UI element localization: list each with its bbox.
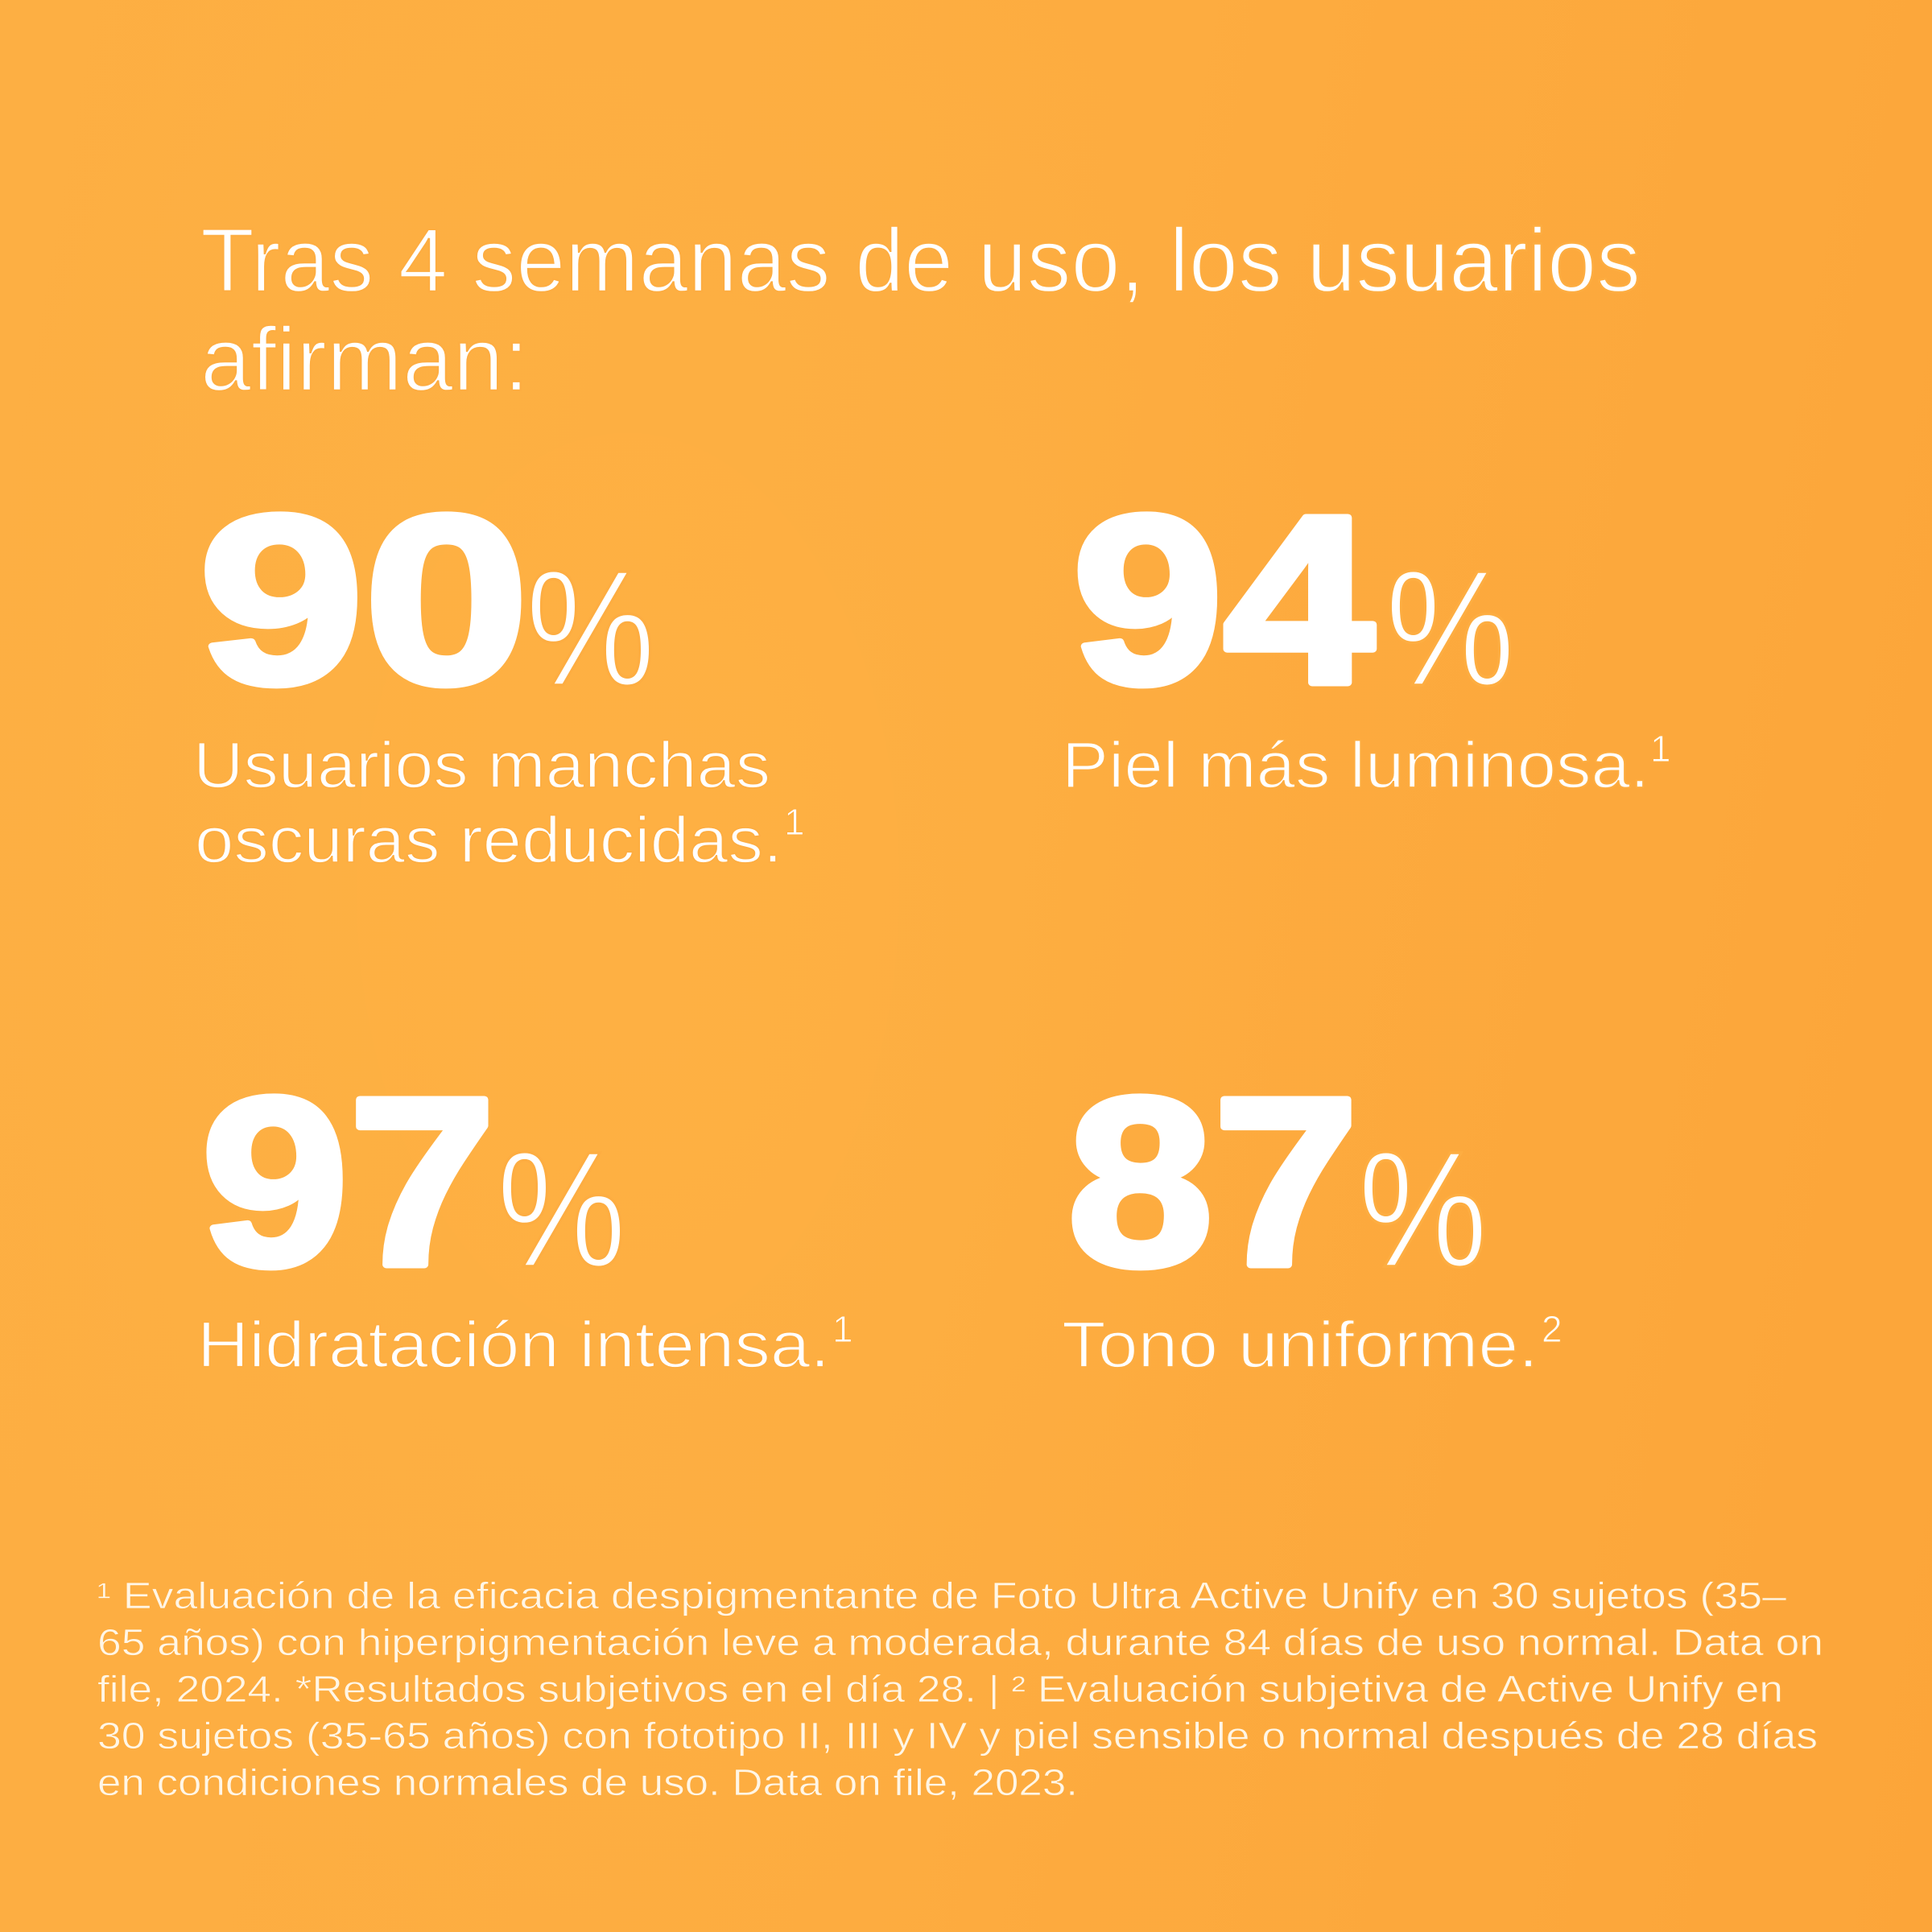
title: Tras 4 semanas de uso, los usuarios xyxy=(200,210,1641,311)
caption: dark spots: Usuarios manchas xyxy=(193,729,770,802)
number: 97% xyxy=(201,1048,626,1316)
title: afirman: xyxy=(200,309,529,410)
number: 87%: 87 xyxy=(1067,1048,1359,1316)
number: 97%: % xyxy=(497,1117,626,1302)
number: 94%: % xyxy=(1385,536,1515,720)
caption: brighter skin: Piel más luminosa. xyxy=(1062,729,1649,802)
footnotes: file, 2024. *Resultados subjetivos en el día 28. | ² Evaluación subjetiva de Active Unify en xyxy=(97,1668,1783,1710)
footnotes: ¹ Evaluación de la eficacia despigmentante de Foto Ultra Active Unify en 30 sujetos (35– xyxy=(97,1575,1786,1616)
panel: stat 87% xyxy=(1062,1048,1563,1381)
panel: stat 90% xyxy=(193,466,805,877)
caption: hydration: 1 xyxy=(832,1308,853,1350)
number: 97%: 97 xyxy=(201,1048,496,1316)
panel: stat 97% xyxy=(197,1048,853,1381)
number: 90% xyxy=(199,466,655,734)
footnotes: 30 sujetos (35-65 años) con fototipo II, III y IV y piel sensible o normal después de 28 días xyxy=(97,1715,1818,1757)
caption: hydration: Hidratación intensa. xyxy=(197,1309,830,1381)
panel: stat 94% xyxy=(1062,466,1671,802)
caption: dark spots: 1 xyxy=(784,801,805,843)
number: 94% xyxy=(1072,466,1515,734)
caption: even tone: Tono uniforme. xyxy=(1062,1309,1538,1381)
number: 90%: % xyxy=(526,536,655,720)
caption: dark spots xyxy=(193,729,805,877)
caption: even tone: 2 xyxy=(1542,1308,1563,1350)
number: 87% xyxy=(1067,1048,1488,1316)
footnotes: en condiciones normales de uso. Data on file, 2023. xyxy=(97,1761,1078,1803)
number: 90%: 90 xyxy=(199,466,529,734)
footnotes xyxy=(97,1575,1823,1803)
caption: dark spots: oscuras reducidas. xyxy=(195,804,782,877)
number: 94%: 94 xyxy=(1072,466,1376,734)
number: 87%: % xyxy=(1358,1117,1488,1302)
title xyxy=(200,210,1641,410)
caption: brighter skin: 1 xyxy=(1650,728,1671,770)
footnotes: 65 años) con hiperpigmentación leve a moderada, durante 84 días de uso normal. Data on xyxy=(97,1621,1823,1663)
